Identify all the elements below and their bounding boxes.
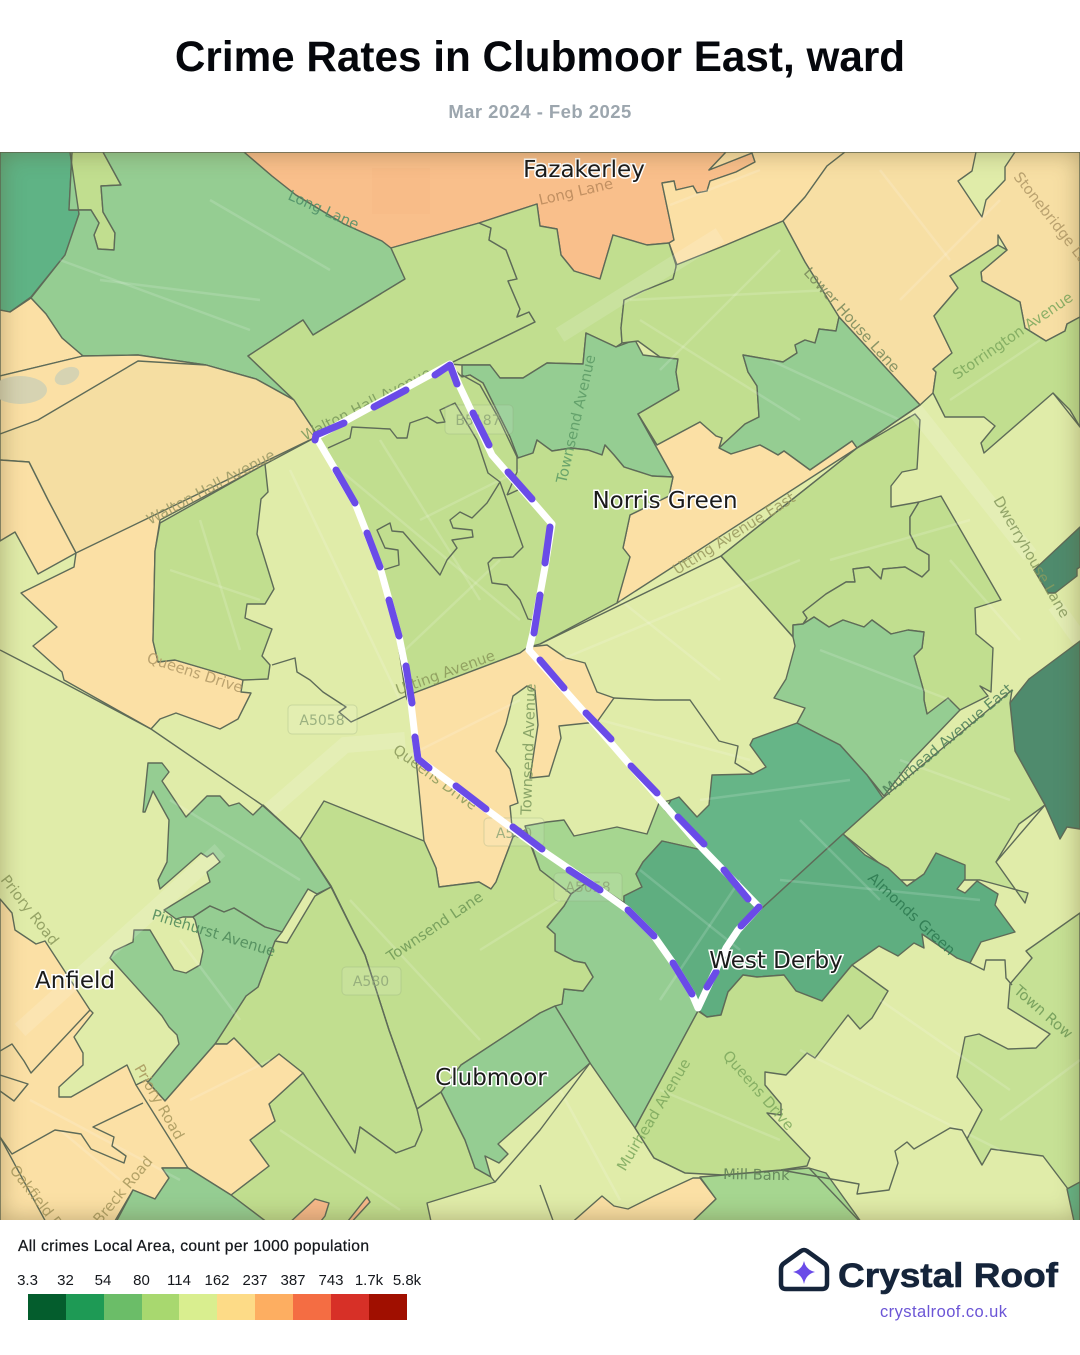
road shields: B5187 <box>455 413 501 429</box>
map labels: Long Lane <box>537 175 615 209</box>
road shields: A5058 <box>299 713 345 729</box>
ward boundary: Clubmoor East <box>315 364 759 1008</box>
place names: Fazakerley <box>523 157 645 183</box>
map labels: Queens Drive <box>145 650 245 697</box>
legend scale labels: 3.3 <box>17 1272 38 1289</box>
map labels: Town Row <box>1010 982 1076 1042</box>
brand: Crystal Roof logo <box>778 1248 1059 1321</box>
wordmark: Crystal Roof <box>838 1257 1059 1295</box>
legend scale labels: 5.8k <box>393 1272 422 1289</box>
road shields <box>288 405 622 995</box>
place names: Clubmoor <box>435 1065 547 1091</box>
legend scale labels: 54 <box>95 1272 111 1289</box>
map labels: Pinehurst Avenue <box>150 907 277 960</box>
legend scale labels: 162 <box>204 1272 230 1289</box>
map labels: Utting Avenue East <box>670 489 799 578</box>
legend scale labels: 1.7k <box>355 1272 384 1289</box>
roads <box>20 235 1080 1030</box>
map labels: Dwerryhouse Lane <box>990 494 1073 621</box>
map labels: Muirhead Avenue East <box>880 680 1016 799</box>
road shields: A5058 <box>565 880 611 896</box>
map labels: Lower House Lane <box>800 264 903 376</box>
legend scale labels: 80 <box>133 1272 150 1289</box>
legend heading: All crimes Local Area, count per 1000 population <box>18 1238 369 1255</box>
place names: Anfield <box>35 968 115 994</box>
map: crime rate choropleth <box>0 152 1080 1220</box>
place names: Norris Green <box>592 488 738 514</box>
legend scale labels: 32 <box>57 1272 74 1289</box>
map labels: Walton Hall Avenue <box>299 365 434 445</box>
map labels: Priory Road <box>131 1062 187 1143</box>
road shields: A580 <box>496 826 532 842</box>
legend colour scale <box>28 1294 407 1320</box>
icon: house with star <box>781 1250 827 1289</box>
website url: crystalroof.co.uk <box>880 1303 1008 1321</box>
map edge vignette <box>0 152 1080 1220</box>
map labels: Almonds Green <box>864 869 958 959</box>
place names <box>35 157 843 1091</box>
park ponds and buildings <box>0 168 430 404</box>
map labels: Townsend Avenue <box>518 683 540 816</box>
map labels: Muirhead Avenue <box>614 1056 694 1174</box>
map labels: Townsend Avenue <box>553 353 599 486</box>
map labels: Queens Drive <box>719 1047 797 1134</box>
legend scale labels: 387 <box>280 1272 306 1289</box>
map labels: Long Lane <box>285 187 361 233</box>
legend: all crimes per 1000 population <box>17 1238 422 1320</box>
map labels: Queens Drive <box>390 741 480 814</box>
map labels: Storrington Avenue <box>950 289 1076 383</box>
interior ward boundaries <box>0 375 1080 1226</box>
legend scale labels: 743 <box>318 1272 344 1289</box>
map labels: Mill Bank <box>723 1166 790 1184</box>
title: Crime Rates in Clubmoor East, ward <box>175 33 905 80</box>
legend scale labels: 237 <box>242 1272 268 1289</box>
subtitle: date range: Mar 2024 - Feb 2025 <box>448 101 632 122</box>
road shields: A580 <box>353 974 389 990</box>
legend scale labels <box>17 1272 422 1289</box>
map labels: Walton Hall Avenue <box>144 446 278 529</box>
legend scale labels: 114 <box>167 1272 191 1289</box>
map labels: Utting Avenue <box>394 647 497 699</box>
place names: West Derby <box>709 948 843 974</box>
map labels: Townsend Lane <box>383 888 486 966</box>
